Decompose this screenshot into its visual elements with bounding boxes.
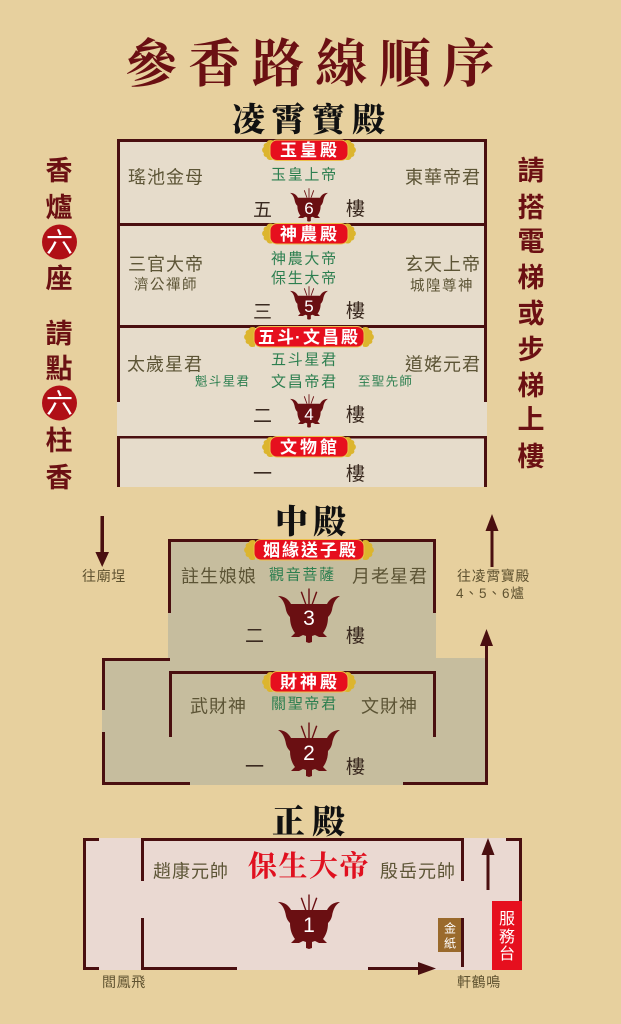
lower hall: 財神殿 [169,671,436,778]
deity: 城隍尊神: 城隍尊神 [410,277,474,294]
plaque: 五斗·文昌殿: 五斗·文昌殿 [258,327,358,347]
floor label: 二樓: 樓 [346,404,365,426]
floor label: 一樓 [253,463,365,485]
icon: incense burner 3 [278,588,340,643]
floor label: 二樓: 樓 [346,625,365,647]
deity: 玉皇上帝: 玉皇上帝 [271,166,338,184]
deity: 保生大帝: 保生大帝 [271,270,338,287]
box: 服務台: 務 [499,928,515,946]
side note: 請搭電梯或步梯上樓: 或 [518,299,544,329]
deity: 文財神: 文財神 [361,697,418,717]
box: 金紙: 金 [444,920,456,936]
side note: 香爐六座 請點六柱香: 爐 [46,193,72,223]
label: 往凌霄寶殿 4、5、6爐 [456,568,530,601]
side note: 香爐六座 請點六柱香 [42,156,77,493]
label: 軒鶴鳴: 軒鶴鳴 [457,974,501,990]
floor label: 一樓: 樓 [346,756,365,778]
heading: 凌霄寶殿: 凌霄寶殿 [232,102,392,139]
deity: 至聖先師: 至聖先師 [358,375,413,389]
side note: 請搭電梯或步梯上樓: 梯 [518,371,544,401]
arrow: up to 凌霄寶殿 [486,514,498,567]
icon: incense burner 4 [290,394,328,428]
plaque: 神農殿: 神農殿 [280,225,340,244]
floor label: 一樓: 一 [245,757,264,778]
floor label: 三樓: 樓 [346,300,365,322]
deity: 殷岳元帥: 殷岳元帥 [380,862,456,882]
side note: 香爐六座 請點六柱香: 點 [46,354,72,384]
deity: 魁斗星君: 魁斗星君 [195,374,250,389]
plaque: 玉皇殿: 玉皇殿 [280,141,340,160]
floor label: 一樓: 一 [253,464,272,485]
icon: incense burner 5 [290,286,328,320]
floor label: 三樓 [253,300,365,323]
box: 服務台: 台 [499,945,515,963]
plaque: 姻緣送子殿 [244,540,374,560]
deity: 三官大帝: 三官大帝 [128,255,204,275]
side note: 請搭電梯或步梯上樓 [518,156,544,472]
deity: 道姥元君: 道姥元君 [405,355,481,375]
deity: 太歲星君: 太歲星君 [127,355,203,375]
side note: 香爐六座 請點六柱香: 六 [46,228,73,258]
panel: 中殿 [102,539,493,785]
icon: incense burner 2: 2 [303,742,315,765]
side note: 請搭電梯或步梯上樓: 步 [518,335,544,365]
side note: 請搭電梯或步梯上樓: 請 [518,156,544,186]
side note: 請搭電梯或步梯上樓: 上 [518,405,544,435]
side note: 香爐六座 請點六柱香: 請 [46,319,72,349]
deity: 濟公禪師: 濟公禪師 [134,276,198,293]
floor label: 五樓: 樓 [346,198,365,220]
icon: incense burner 1: 1 [303,914,315,937]
outer walls [102,642,488,785]
side note: 請搭電梯或步梯上樓: 電 [518,227,544,257]
box: 金紙: 紙 [444,936,456,950]
main deity: 保生大帝: 保生大帝 [248,850,370,883]
floor 5: 玉皇殿 [128,140,481,222]
arrow: route up right side [480,629,493,646]
label: 往廟埕: 往廟埕 [82,568,126,584]
side note: 香爐六座 請點六柱香: 香 [46,156,72,186]
floor label: 五樓: 五 [253,200,272,221]
icon: incense burner 5: 5 [304,297,314,316]
label: 往凌霄寶殿 4、5、6爐: 往凌霄寶殿 [457,568,530,584]
deity: 關聖帝君: 關聖帝君 [271,696,338,712]
floor label: 一樓: 樓 [346,463,365,485]
arrow: route upward [482,838,494,890]
side note: 香爐六座 請點六柱香: 座 [46,264,72,294]
side note: 請搭電梯或步梯上樓: 梯 [518,263,544,293]
floor label: 三樓: 三 [253,302,272,323]
plaque: 財神殿 [262,672,356,692]
deity: 觀音菩薩: 觀音菩薩 [269,566,336,584]
deity: 瑤池金母: 瑤池金母 [128,168,204,188]
plaque: 神農殿 [262,223,356,244]
panel: 正殿 [83,838,522,975]
floor 2: 五斗文昌殿 [127,326,481,428]
arrow: route to the right [368,962,436,975]
deity: 註生娘娘: 註生娘娘 [181,567,257,587]
heading: 中殿: 中殿 [275,504,351,541]
deity: 武財神: 武財神 [190,697,247,717]
icon: incense burner 3: 3 [303,607,315,630]
plaque: 文物館: 文物館 [280,437,340,457]
deity: 神農大帝: 神農大帝 [271,250,338,268]
deity: 趙康元帥: 趙康元帥 [153,862,229,882]
floor label: 二樓 [253,404,365,427]
floor label: 二樓 [245,625,365,647]
plaque: 玉皇殿 [262,140,356,160]
box: 服務台 [492,901,522,970]
floor label: 二樓: 二 [245,626,264,647]
deity: 五斗星君: 五斗星君 [271,352,338,368]
side note: 請搭電梯或步梯上樓: 樓 [518,442,544,472]
box: 服務台: 服 [499,910,515,928]
icon: incense burner 4: 4 [304,405,314,424]
deity: 文昌帝君: 文昌帝君 [271,374,338,390]
heading: 正殿: 正殿 [272,804,352,841]
label: 往凌霄寶殿 4、5、6爐: 4、5、6爐 [456,586,525,601]
panel: 凌霄寶殿 floors [117,139,487,487]
title: 參香路線順序 [125,36,506,94]
icon: incense burner 1 [278,894,340,949]
floor label: 一樓 [245,756,365,778]
deity: 東華帝君: 東華帝君 [405,168,481,188]
box: 金紙 [438,918,461,952]
icon: incense burner 6: 6 [304,199,314,218]
floor label: 二樓: 二 [253,406,272,427]
side note: 香爐六座 請點六柱香: 香 [46,463,72,493]
side note: 香爐六座 請點六柱香: 柱 [46,426,72,456]
icon: incense burner 2 [278,722,340,777]
arrow: down to 廟埕 [95,516,109,567]
label: 閻鳳飛: 閻鳳飛 [102,974,146,990]
icon: incense burner 6 [290,188,328,222]
upper hall: 姻緣送子殿 [168,539,436,647]
floor label: 五樓 [253,198,365,221]
deity: 玄天上帝: 玄天上帝 [405,255,481,275]
floor 3: 神農殿 [128,223,481,323]
plaque: 財神殿: 財神殿 [280,673,340,692]
deity: 月老星君: 月老星君 [352,567,428,587]
floor 1: 文物館 [253,436,365,485]
plaque: 姻緣送子殿: 姻緣送子殿 [263,541,358,560]
side note: 香爐六座 請點六柱香: 六 [46,389,73,419]
side note: 請搭電梯或步梯上樓: 搭 [518,193,544,223]
